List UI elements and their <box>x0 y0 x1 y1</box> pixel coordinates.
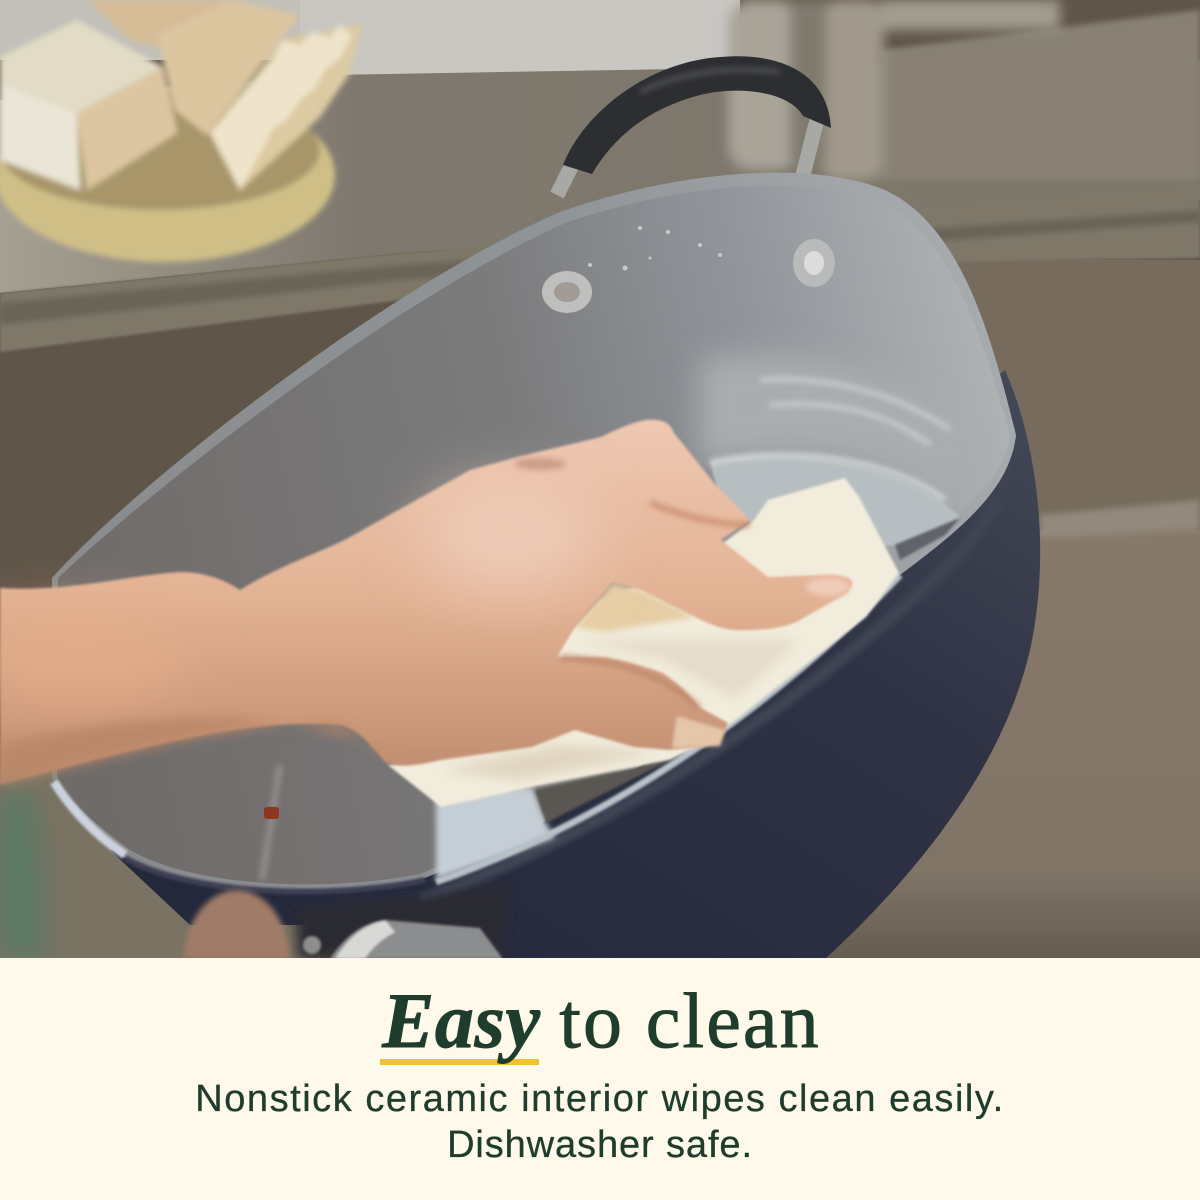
caption panel <box>0 958 1200 1200</box>
dark gap below pan <box>295 885 510 959</box>
finger crease <box>650 503 750 525</box>
index fingertip <box>806 578 850 596</box>
pan rim <box>52 173 1016 892</box>
body text: Nonstick ceramic interior wipes clean easily. <box>195 1078 1005 1120</box>
knuckle crease <box>514 458 566 470</box>
hand and arm <box>0 420 853 785</box>
hand highlight <box>420 485 600 595</box>
cloth <box>388 478 899 807</box>
interior reflections <box>54 355 990 892</box>
sink background <box>0 0 1200 959</box>
pan interior <box>57 186 1010 884</box>
water droplets <box>588 226 722 270</box>
lower finger crease <box>560 657 700 708</box>
pan outer navy body <box>110 370 1040 959</box>
blurred thumb at bottom <box>184 890 290 959</box>
arm tone <box>0 615 190 705</box>
heading underline <box>380 1059 539 1065</box>
photo: hand wiping ceramic pan <box>0 0 1200 958</box>
pan handle <box>557 56 831 195</box>
fingernail <box>672 716 725 748</box>
heading: Easy to clean <box>382 977 821 1064</box>
faucet <box>728 0 1060 180</box>
arm and palm shadow <box>0 719 400 785</box>
body text: Dishwasher safe. <box>447 1124 753 1166</box>
body text <box>195 1078 1005 1166</box>
soap and brush on wooden dish <box>0 0 363 262</box>
metal handle at bottom of pan <box>303 920 503 959</box>
navy lip highlight <box>420 500 1000 900</box>
rivets <box>542 239 835 313</box>
green blur at lower left <box>0 795 45 959</box>
